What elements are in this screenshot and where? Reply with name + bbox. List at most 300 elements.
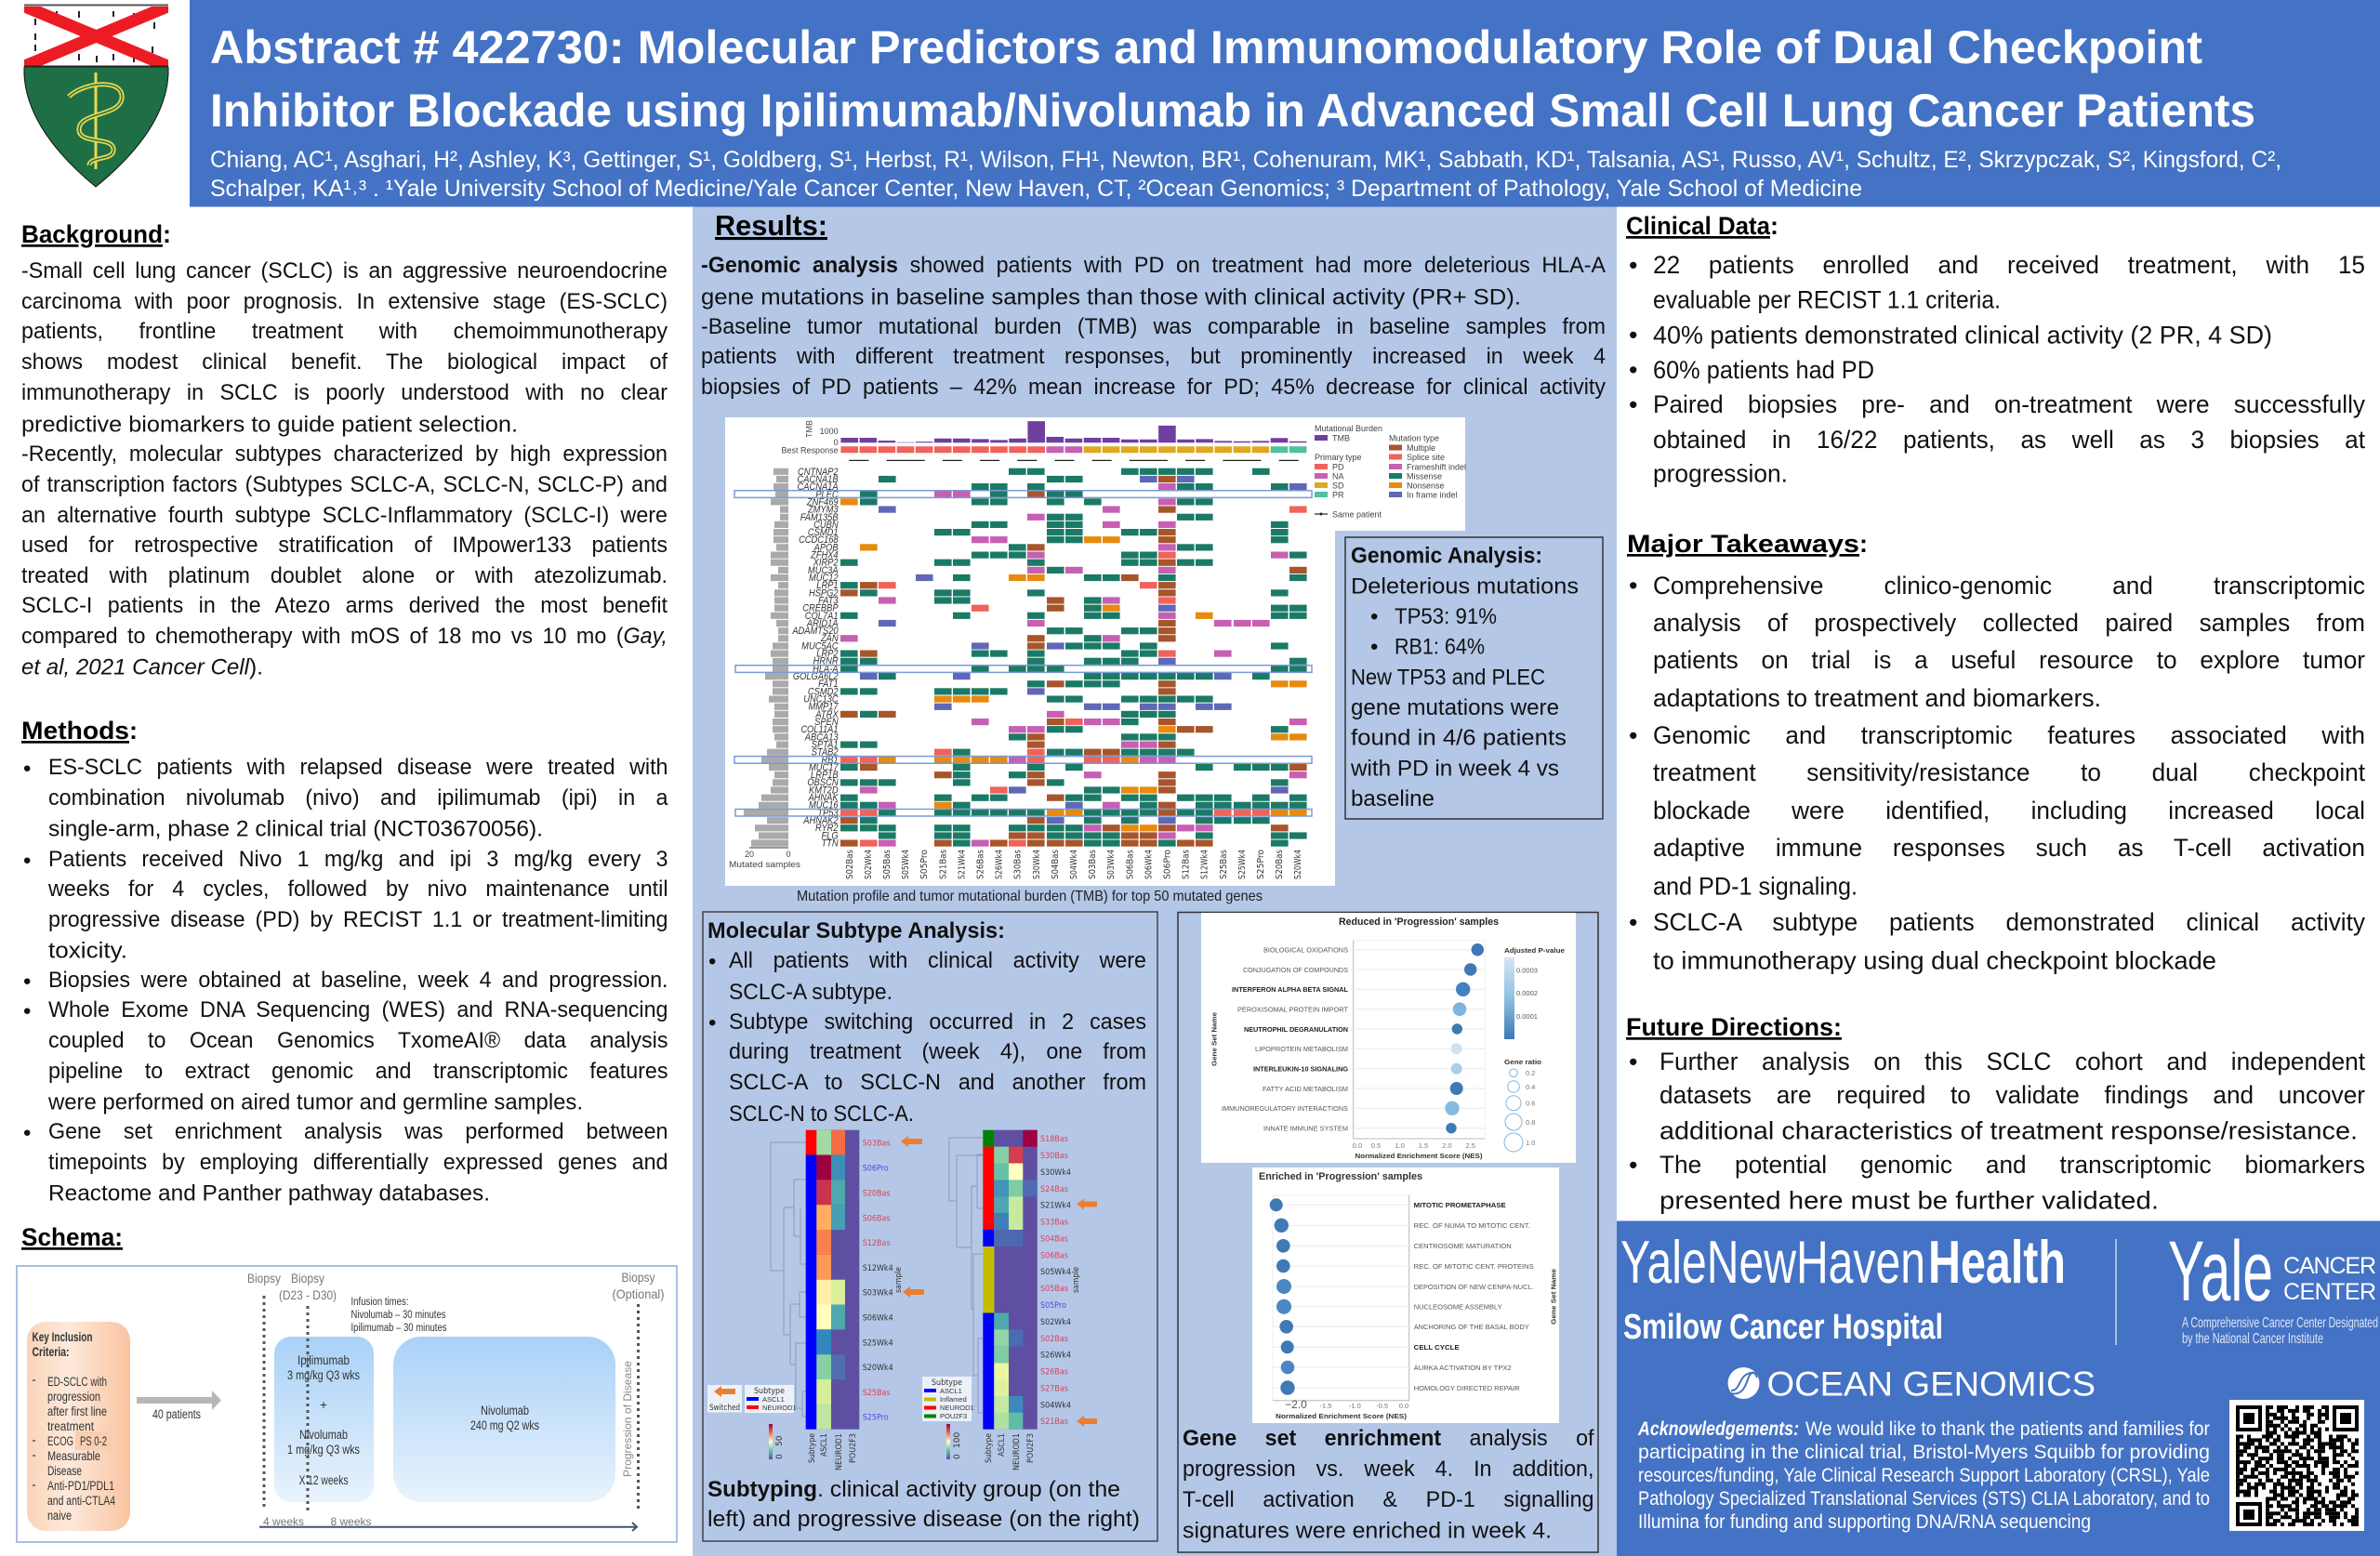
panel: clinical data: Paired biopsies pre- and on-treatment were successfully [1653,390,2365,418]
infusion times: Nivolumab – 30 minutes [351,1310,446,1321]
panel: genomic analysis: Deleterious mutations [1351,574,1579,599]
chart legend: Multiple [1407,443,1435,453]
gene labels: ADAMTS20 [791,626,839,637]
results text: biopsies of PD patients – 42% mean increase for PD; 45% decrease for clinical activity [701,375,1606,400]
key inclusion criteria box: and anti-CTLA4 [47,1494,115,1508]
heatmap: progressive disease group: Subtype [985,1433,994,1463]
sample labels: S20Bas [1275,850,1285,879]
authors [210,147,2281,202]
treatment box: ipilimumab and nivolumab: 3 mg/kg Q3 wks [287,1368,360,1382]
chart: enriched in progression: −2.0 [1285,1398,1307,1411]
panel: molecular subtype analysis: SCLC-N to SCLC-A. [729,1101,914,1127]
heatmap: progressive disease group: sample [1072,1267,1081,1293]
panel: background: predictive biomarkers to guide patient selection. [21,413,518,437]
chart: enriched in progression: -0.5 [1376,1402,1388,1410]
results text: -Genomic analysis showed patients with PD on treatment had more deleterious HLA-A [701,253,1606,278]
key inclusion criteria box: Disease [47,1464,82,1478]
legend: switched: Switched [709,1404,740,1413]
mutated samples bars: 20 [745,850,754,859]
heatmap: clinical activity group: S25Pro [863,1413,889,1422]
chart: mutation profile [725,417,1466,886]
legend: right subtype: Inflamed [940,1395,967,1404]
chart: reduced in progression: 1.5 [1419,1141,1428,1150]
chart legend: In frame indel [1407,491,1458,500]
panel: major takeaways: patients on trial is a useful resource to explore tumor [1653,646,2365,674]
gene set labels: FATTY ACID METABOLISM [1263,1085,1348,1093]
heading: methods: Methods [21,717,129,745]
chart: enriched in progression: -1.0 [1349,1402,1361,1410]
acknowledgements: participating in the clinical trial, Bristol-Myers Squibb for providing [1638,1442,2210,1463]
heading: clinical data: Clinical Data [1626,212,1771,240]
panel: methods: Biopsies were obtained at baseline, week 4 and progression. [48,968,668,993]
panel: methods: Reactome and Panther pathway databases. [48,1180,490,1207]
heatmap: progressive disease group: S02Wk4 [1040,1318,1071,1327]
treatment box: ipilimumab and nivolumab: X 12 weeks [299,1473,349,1487]
sample labels [845,850,1303,879]
logo: Yale Cancer Center: CENTER [2283,1279,2376,1305]
gene labels: MUC3A [808,565,839,576]
heatmap: progressive disease group: S02Bas [1040,1335,1068,1344]
heatmap: clinical activity group: Subtype [808,1433,817,1463]
panel: molecular subtype analysis: Subtype switching occurred in 2 cases [729,1009,1146,1035]
heatmap: progressive disease group: S05Pro [1040,1301,1066,1311]
gene set labels: PEROXISOMAL PROTEIN IMPORT [1237,1006,1348,1013]
chart legend: Missense [1407,472,1442,481]
panel: footer logos and acknowledgements [1617,1221,2380,1556]
sample labels: S25Wk4 [1237,850,1248,879]
panel: methods: coupled to Ocean Genomics TxomeAI® data analysis [48,1028,668,1053]
key inclusion criteria box: Measurable [47,1449,100,1463]
TMB bars [805,420,1306,447]
heatmap: progressive disease group: S18Bas [1040,1135,1068,1144]
results text [701,252,1606,403]
heatmap: progressive disease group: S26Wk4 [1040,1352,1071,1361]
heatmap: progressive disease group: S33Bas [1040,1218,1068,1227]
sample labels: S21Bas [939,850,948,879]
gene labels: AHNAK2 [802,815,839,826]
panel: major takeaways: and PD-1 signaling. [1653,872,1858,900]
gene labels: MUC16 [809,800,839,811]
chart caption: Mutation profile and tumor mutational burden (TMB) for top 50 mutated genes [797,889,1263,904]
gene set labels: MITOTIC PROMETAPHASE [1414,1201,1506,1209]
chart: reduced in progression: Reduced in 'Progression' samples [1339,916,1499,928]
gene labels: ARID1A [806,618,839,629]
treatment box: ipilimumab and nivolumab: + [320,1398,327,1412]
title [210,21,2255,137]
panel: future directions: additional characteristics of treatment response/resistance. [1659,1117,2358,1145]
key inclusion criteria box [27,1322,130,1531]
best response strip: Best Response [782,446,839,455]
panel: future directions: datasets are required to validate findings and uncover [1659,1081,2365,1109]
heatmap: clinical activity group: S12Bas [863,1239,891,1248]
chart: reduced in progression: 2.0 [1442,1141,1452,1150]
chart: reduced in progression: 0.0 [1353,1141,1362,1150]
logo: Yale Cancer Center: CANCER [2283,1253,2376,1279]
panel: clinical data: • [1629,356,1637,384]
gene labels: HSPG2 [809,588,839,600]
panel: clinical data: 22 patients enrolled and received treatment, with 15 [1653,251,2365,279]
panel: future directions: • [1629,1151,1637,1179]
subtyping caption: Subtyping [707,1477,817,1502]
sample labels: S26Bas [976,850,985,879]
gene labels: FAM135B [800,512,839,523]
panel: major takeaways: analysis of prospectively collected paired samples from [1653,609,2365,637]
heatmap: progressive disease group: 100 [953,1432,962,1448]
panel: genomic analysis: Genomic Analysis: [1351,543,1542,569]
gene ratio legend: 0.6 [1526,1099,1535,1108]
panel: methods: Gene set enrichment analysis was performed between [48,1119,668,1144]
progression of disease label: Progression of Disease [621,1361,634,1477]
treatment box: ipilimumab and nivolumab: Ipilimumab [298,1353,350,1367]
gene labels: ZAN [820,633,839,644]
panel: background: -Recently, molecular subtypes characterized by high expression [21,442,668,467]
sample labels: S30Wk4 [1032,850,1042,879]
key inclusion criteria box: after first line [47,1404,107,1418]
panel: background: : [163,220,171,248]
gene labels: CACNA1B [798,474,839,485]
subtyping caption: . clinical activity group (on the [817,1477,1120,1502]
legend: right subtype: Subtype [932,1378,962,1388]
gene labels: AHNAK [808,793,840,804]
treatment box: ipilimumab and nivolumab: Nivolumab [299,1428,348,1442]
panel: background: used for retrospective stratification of IMpower133 patients [21,533,668,558]
gene set caption [1183,1425,1593,1543]
p-value legend: 0.0002 [1516,989,1538,997]
sample labels: S02Bas [845,850,855,879]
gene labels: CACNA1A [798,481,839,493]
gene labels: COL7A1 [805,611,839,622]
heatmap: progressive disease group: POU2F3 [1026,1433,1036,1463]
gene labels: HRNR [813,656,839,667]
sample labels: S06Bas [1125,850,1136,879]
gene labels: LRP1 [816,580,839,591]
infusion times [351,1297,447,1334]
panel: methods: pipeline to extract genomic and transcriptomic features [48,1059,668,1084]
panel: background: -Small cell lung cancer (SCLC) is an aggressive neuroendocrine [21,258,668,284]
timeline arrow: 4 weeks [263,1515,304,1528]
key inclusion criteria box: Key Inclusion [32,1330,93,1344]
key inclusion criteria box: progression [47,1390,100,1404]
key inclusion criteria box: ED-SCLC with [47,1375,107,1389]
panel: genomic analysis: baseline [1351,786,1435,811]
heatmap: progressive disease group: S04Wk4 [1040,1402,1071,1411]
panel: schema diagram [17,1266,677,1542]
logo: Yale Cancer Center: Yale [2168,1224,2273,1319]
gene labels: RB1 [821,755,839,766]
panel: methods: ES-SCLC patients with relapsed disease were treated with [48,755,668,780]
gene ratio legend: 0.4 [1526,1083,1535,1091]
panel: background: immunotherapy in SCLC is poorly understood with no clear [21,380,668,405]
panel: future directions: Further analysis on this SCLC cohort and independent [1659,1048,2365,1075]
gene labels: LRP1B [811,770,839,781]
enrichment dots [1445,943,1484,1133]
heatmap: progressive disease group [946,1130,1081,1470]
key inclusion criteria box: naive [47,1509,72,1523]
gene labels: MUC12 [809,573,839,584]
panel: future directions: • [1629,1048,1637,1076]
sample labels: S06Wk4 [1144,850,1155,879]
treatment box: nivolumab maintenance [393,1337,615,1502]
chart: reduced in progression [1201,913,1576,1163]
panel: clinical data: evaluable per RECIST 1.1 criteria. [1653,286,2001,314]
infusion times: Infusion times: [351,1297,409,1308]
chart legend: Frameshift indel [1407,463,1466,472]
heatmap: clinical activity group: ASCL1 [820,1433,829,1457]
panel: methods: timepoints by employing differentially expressed genes and [48,1150,668,1175]
panel: methods: single-arm, phase 2 clinical trial (NCT03670056). [48,816,543,842]
gene labels: XIRP2 [813,558,839,569]
panel: major takeaways: • [1629,721,1637,749]
heatmap: clinical activity group: S03Bas [863,1140,891,1149]
sample labels: S03Bas [1088,850,1098,879]
panel: clinical data: • [1629,251,1637,279]
panel: genomic analysis: gene mutations were [1351,695,1559,720]
panel: clinical data: : [1770,212,1778,240]
gene set labels: AURKA ACTIVATION BY TPX2 [1414,1364,1512,1372]
gene set labels [1222,946,1348,1132]
panel: results background [693,206,1617,1556]
sample labels: S30Bas [1013,850,1023,879]
logo: Ocean Genomics: OCEAN GENOMICS [1766,1365,2096,1404]
biopsy labels: Biopsy [621,1270,654,1285]
panel: major takeaways: • [1629,572,1637,600]
gene labels: CREBBP [802,603,839,614]
gene labels [791,467,840,850]
chart: enriched in progression: Normalized Enrichment Score (NES) [1276,1412,1408,1420]
gene ratio legend [1504,1058,1541,1152]
acknowledgements: Pathology Specialized Translational Services (STS) CLIA Laboratory, and to [1638,1488,2210,1510]
panel: future directions: The potential genomic and transcriptomic biomarkers [1659,1151,2365,1179]
panel: methods: • [23,757,31,781]
chart legend: Mutation type [1389,433,1439,442]
chart legend: Nonsense [1407,481,1445,491]
gene labels: ATRX [814,709,840,720]
logo: Yale New Haven Health: YaleNewHaven [1620,1228,1925,1296]
key inclusion criteria box: ECOG [47,1434,73,1448]
gene labels: CNTNAP2 [798,467,839,478]
panel: clinical data: 60% patients had PD [1653,356,1874,384]
results text: -Baseline tumor mutational burden (TMB) was comparable in baseline samples from [701,314,1606,339]
panel: methods: Patients received Nivo 1 mg/kg and ipi 3 mg/kg every 3 [48,847,668,872]
panel: major takeaways: : [1859,530,1868,558]
gene set labels: HOMOLOGY DIRECTED REPAIR [1414,1384,1520,1392]
chart legend: SD [1332,481,1344,491]
legend: right subtype: POU2F3 [940,1412,967,1420]
panel: molecular subtype analysis: • [708,1010,716,1035]
gene set labels: INNATE IMMUNE SYSTEM [1263,1125,1348,1132]
panel: background: shows modest clinical benefit. The biological impact of [21,349,668,375]
panel: genomic analysis: found in 4/6 patients [1351,725,1567,751]
acknowledgements: Illumina for funding and supporting DNA/RNA sequencing [1638,1511,2091,1533]
sample labels: S20Wk4 [1293,850,1303,879]
panel: methods: weeks for 4 cycles, followed by nivo maintenance until [48,877,668,902]
gene labels: CSMD1 [808,527,839,538]
panel: molecular subtype analysis: SCLC-A to SCLC-N and another from [729,1070,1146,1095]
legend: left subtype: ASCL1 [762,1395,785,1404]
heatmap: clinical activity group: S12Wk4 [863,1264,893,1273]
gene set caption: Gene set enrichment analysis of [1183,1426,1593,1451]
panel: future directions [1626,1013,2365,1214]
sample labels: S26Wk4 [995,850,1004,879]
panel: major takeaways: Genomic and transcriptomic features associated with [1653,721,2365,749]
heatmap: clinical activity group: S20Bas [863,1190,891,1199]
panel: clinical data: • [1629,390,1637,418]
acknowledgements [1637,1418,2210,1533]
treatment box: nivolumab maintenance: 240 mg Q2 wks [470,1418,539,1432]
gene set labels [1414,1201,1534,1392]
timeline arrow [259,1515,637,1531]
biopsy labels: (D23 - D30) [279,1287,337,1302]
gene set labels: DEPOSITION OF NEW CENPA-NUCL. [1414,1283,1534,1291]
chart: enriched in progression: -1.5 [1320,1402,1331,1410]
mutated samples bars: Mutated samples [729,860,801,869]
heading: future directions: Future Directions: [1626,1013,1842,1041]
panel: clinical data [1626,212,2365,487]
panel: future directions: presented here must be further validated. [1659,1186,2159,1214]
gene labels: ZNF469 [806,497,839,508]
subtyping caption: left) and progressive disease (on the right) [707,1507,1140,1532]
panel: genomic analysis: • [1370,634,1378,660]
chart legend: NA [1332,472,1344,481]
gene labels: ZFHX4 [810,550,839,561]
biopsy labels [247,1270,664,1302]
panel: clinical data: 40% patients demonstrated clinical activity (2 PR, 4 SD) [1653,322,2272,349]
arrows: switched samples [901,1136,1097,1427]
TMB bars: TMB [805,420,814,438]
biopsy labels: (Optional) [612,1286,664,1301]
key inclusion criteria box: treatment [47,1419,94,1433]
panel: clinical data: obtained in 16/22 patients, as well as 3 biopsies at [1653,426,2365,454]
panel: gene set enrichment [1178,913,1598,1552]
title: Abstract # 422730: Molecular Predictors and Immunomodulatory Role of Dual Checkpoint [210,21,2202,73]
panel: methods: were performed on aired tumor and germline samples. [47,1089,583,1115]
gene set labels: REC. OF NUMA TO MITOTIC CENT. [1414,1221,1530,1230]
biopsy labels: Biopsy [291,1271,324,1286]
gene set labels: NUCLEOSOME ASSEMBLY [1414,1303,1502,1311]
heatmap: progressive disease group: S27Bas [1040,1385,1068,1394]
panel: genomic analysis [1345,537,1603,819]
treatment box: ipilimumab and nivolumab [274,1337,374,1502]
heatmap: progressive disease group: S21Bas [1040,1418,1068,1427]
gene labels: FAT3 [818,596,839,607]
gene labels: CSMD2 [808,687,839,698]
heatmap: clinical activity group: S06Pro [863,1164,889,1173]
sample labels: S12Bas [1181,850,1192,879]
treatment box: nivolumab maintenance: Nivolumab [481,1404,529,1418]
panel: methods: • [23,848,31,874]
gene labels: GOLGA6L2 [793,671,839,682]
gene set labels: BIOLOGICAL OXIDATIONS [1263,946,1348,954]
legend: left subtype: NEUROD1 [762,1404,797,1412]
panel: molecular subtype analysis: during treatment (week 4), one from [729,1039,1146,1064]
arrow: 40 patients: 40 patients [152,1407,201,1421]
sample labels: S02Wk4 [864,850,874,879]
heatmap: progressive disease group: S26Bas [1040,1368,1068,1378]
panel: methods: progressive disease (PD) by RECIST 1.1 or treatment-limiting [48,907,668,932]
panel: molecular subtype analysis: All patients with clinical activity were [729,948,1146,973]
heatmap: clinical activity group: sample [894,1267,904,1293]
gene labels: MUC17 [809,762,839,773]
chart: enriched in progression: Gene Set Name [1549,1269,1558,1325]
acknowledgements: We would like to thank the patients and families for [1805,1418,2210,1440]
heatmap: progressive disease group: S05Bas [1040,1285,1068,1294]
mutated samples bars [729,468,801,869]
gene labels: ABCA13 [804,732,839,744]
gene ratio legend: 0.2 [1526,1069,1535,1077]
panel: background [21,220,668,680]
legend: right subtype [922,1377,974,1421]
TMB bars: 1000 [820,427,839,436]
results text: gene mutations in baseline samples than those with clinical activity (PR+ SD). [701,284,1521,310]
panel: genomic analysis: RB1: 64% [1395,634,1485,660]
gene labels: OBSCN [807,777,839,788]
panel: molecular subtype analysis: SCLC-A subtype. [729,980,892,1005]
panel: methods: : [129,717,138,745]
heatmap: progressive disease group: S21Wk4 [1040,1201,1071,1210]
same patient connectors [850,459,1298,461]
panel: background: treated with platinum doublet alone or with atezolizumab. [21,563,668,588]
heatmap: clinical activity group: S06Bas [863,1214,891,1223]
gene set labels: ANCHORING OF THE BASAL BODY [1414,1323,1529,1331]
gene set labels: IMMUNOREGULATORY INTERACTIONS [1222,1104,1348,1113]
panel: background: of transcription factors (Subtypes SCLC-A, SCLC-N, SCLC-P) and [21,472,668,497]
panel: background: patients, frontline treatment with chemoimmunotherapy [21,319,668,344]
panel: methods: toxicity. [48,939,127,963]
gene labels: PLEC [815,490,839,501]
gene labels: TP53 [817,808,839,819]
key inclusion criteria box: Anti-PD1/PDL1 [47,1479,114,1493]
gene labels: SPEN [814,717,839,728]
gene labels: ZMYM3 [807,505,839,516]
authors: Chiang, AC¹, Asghari, H², Ashley, K³, Gettinger, S¹, Goldberg, S¹, Herbst, R¹, Wilson, FH¹, Newton, BR¹, Cohenuram, MK¹, Sabbath, KD¹, Talsania, AS¹, Russo, AV¹, Schultz, E², Skrzypczak, S², Kingsford, C², [210,147,2281,173]
gene labels: FAT1 [818,679,839,690]
logo: Yale New Haven Health: Health [1928,1228,2066,1296]
heatmap: progressive disease group: S30Wk4 [1040,1168,1071,1178]
panel: molecular subtype analysis: • [708,949,716,974]
logo: Yale New Haven Health: Smilow Cancer Hospital [1623,1308,1943,1347]
panel: major takeaways: adaptive immune responses such as T-cell activation [1653,834,2365,862]
panel: methods: Whole Exome DNA Sequencing (WES) and RNA-sequencing [48,997,668,1022]
panel: major takeaways [1627,530,2365,974]
gene set labels: LIPOPROTEIN METABOLISM [1255,1045,1348,1053]
authors: Schalper, KA¹˒³ . ¹Yale University School of Medicine/Yale Cancer Center, New Haven, CT, ²Ocean Genomics; ³ Department of Pathology, Yale School of Medicine [210,176,1862,202]
heatmap: clinical activity group: S20Wk4 [863,1364,893,1373]
best response strip [782,446,1306,455]
heatmap: clinical activity group: NEUROD1 [835,1433,844,1470]
p-value legend [1504,946,1565,1039]
heading: background: Background [21,220,163,248]
panel: methods: • [23,1121,31,1145]
heatmap: clinical activity group: S06Wk4 [863,1314,893,1324]
chart legend: Primary type [1315,453,1362,462]
legend: left subtype: Subtype [754,1387,785,1396]
gene labels: SPTA1 [812,740,839,751]
panel: major takeaways: treatment sensitivity/resistance to dual checkpoint [1653,758,2365,786]
gene set labels: CONJUGATION OF COMPOUNDS [1243,966,1348,974]
panel: major takeaways: blockade were identified, including increased local [1653,797,2365,824]
QR code [2229,1400,2364,1531]
gene labels: FLG [821,831,839,842]
chart legend: Same patient [1332,509,1382,519]
chart legend: Splice site [1407,453,1445,462]
enrichment dots [1270,1198,1295,1395]
chart legend: PD [1332,463,1344,472]
p-value legend: 0.0003 [1516,967,1538,974]
logo: Yale New Haven Health [1620,1228,2066,1347]
acknowledgements: Acknowledgements: [1637,1418,1799,1440]
sample labels: S05Wk4 [901,850,911,879]
sample labels: S04Wk4 [1069,850,1079,879]
